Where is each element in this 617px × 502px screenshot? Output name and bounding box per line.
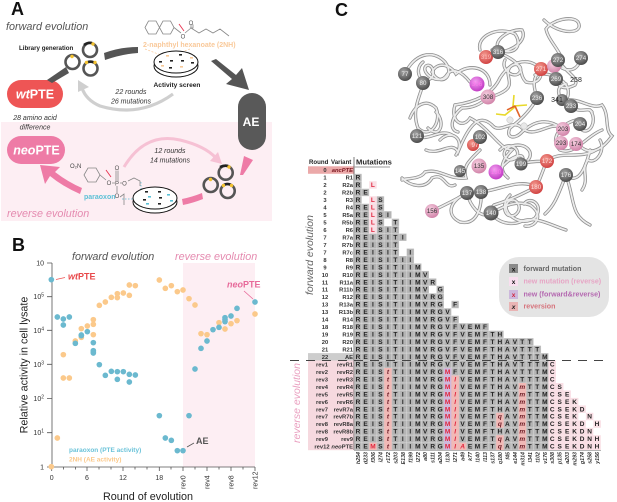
round column: 20 xyxy=(322,340,328,346)
legend: paraoxon (PTE activity) xyxy=(69,447,141,454)
round column: rev7 xyxy=(316,407,328,413)
molecule: paraoxon: O xyxy=(115,166,120,172)
round column: 11 xyxy=(322,280,329,286)
legend panel xyxy=(499,257,609,317)
x-axis tick labels: rev0 xyxy=(180,475,188,489)
legend: 2NH (AE activity) xyxy=(69,456,121,464)
mutation letters: RE L SIT xyxy=(356,227,397,234)
label: forward evolution: forward evolution xyxy=(6,21,88,33)
x-axis tick labels: 0 xyxy=(50,475,54,482)
x-axis tick labels: 6 xyxy=(85,475,89,482)
mutation letters: REISITIIMVRGVFVEMFTHAVTTTMC xyxy=(356,361,555,368)
variant column: R1 xyxy=(346,176,354,182)
residue spheres: 140 xyxy=(486,210,497,217)
y-axis tick labels: 4 xyxy=(41,326,44,332)
residue spheres: 180 xyxy=(531,184,542,191)
mutation letters: REISITIIMVRG xyxy=(356,294,443,301)
molecule: paraoxon: P xyxy=(115,182,119,188)
y-axis title: Relative activity in cell lysate xyxy=(18,297,30,433)
variant column: R6 xyxy=(346,228,354,234)
text: reverse rounds: 12 rounds xyxy=(154,148,186,155)
label: library generation: Library generation xyxy=(19,45,74,52)
residue column labels: m293 xyxy=(573,452,579,466)
round column: 22 xyxy=(322,355,328,361)
icon: plasmid rings forward xyxy=(66,42,98,76)
wtPTE pill xyxy=(7,80,63,108)
variant column: R13a xyxy=(339,303,354,309)
AE pill: AE xyxy=(243,115,259,129)
pink band xyxy=(183,263,255,467)
mutation letters: REISITIIMVRGVFVEMFTHAVTTTM xyxy=(356,354,548,361)
mutation letters: REISITIIMVRGV xyxy=(356,309,450,316)
residue column labels: l140 xyxy=(476,452,482,462)
text: reverse rounds: 14 mutations xyxy=(150,158,191,164)
arrow: gray recycle xyxy=(78,80,173,110)
residue spheres: 274 xyxy=(576,55,587,62)
round column: 1 xyxy=(323,176,327,182)
round column: rev3 xyxy=(316,377,329,383)
legend xyxy=(69,447,141,464)
mutation letters: REIS t TIIMVRG M I VEMFTHAV m TTMCSE xyxy=(356,391,570,398)
y-axis tick labels: 10 xyxy=(33,362,41,369)
round column: 2 xyxy=(323,191,327,197)
mutation letters: REIS t TIIMVRG M I VEMFTHAVTTTMC xyxy=(356,376,555,383)
residue column labels: s137 xyxy=(490,451,496,464)
callout: wtPTE xyxy=(56,272,96,282)
heading: panel letter B: B xyxy=(12,235,25,255)
mutation letters: REIS t TIIMVRG M I VEMFTHAV m TTMCSEKDN xyxy=(356,429,592,436)
residue column labels xyxy=(356,451,601,466)
residue column labels: l113 xyxy=(483,452,489,462)
round column: rev8 xyxy=(316,422,329,428)
round column: rev1 xyxy=(316,362,329,368)
residue spheres xyxy=(398,45,588,220)
variant column: ancPTE xyxy=(332,168,354,174)
variant column: revR7a xyxy=(334,407,354,413)
residue spheres: 203 xyxy=(558,126,569,133)
table row highlights xyxy=(308,166,354,450)
variant column: R7c xyxy=(342,250,354,256)
round column: 2 xyxy=(323,183,327,189)
variant column: R7a xyxy=(342,235,354,241)
residue spheres: 80 xyxy=(420,80,427,87)
variant column: rev9 xyxy=(341,437,354,443)
round column: 14 xyxy=(322,318,329,324)
variant column: R3 xyxy=(346,198,354,204)
dashed lines to plate xyxy=(145,49,190,57)
round column: rev7 xyxy=(316,415,328,421)
variant column: R13b xyxy=(339,310,353,316)
y-axis tick labels: 1 xyxy=(40,464,44,472)
orange points: 2NH activity xyxy=(48,277,258,469)
mutation letters: REISITIIMVRGVFVEMFTH xyxy=(356,332,503,338)
table header xyxy=(309,157,392,450)
y-axis tick labels: 3 xyxy=(41,360,44,366)
round column xyxy=(314,168,330,451)
mutation letters: RE M S t TIIMVRG M I A EMFT q AV m TTMCSEKDNH xyxy=(356,444,600,451)
mutation letters: RE L SI xyxy=(356,212,389,219)
residue column labels: i274 xyxy=(378,452,384,462)
ligand xyxy=(496,95,527,129)
variant column: R8 xyxy=(346,258,354,264)
callout: AE xyxy=(187,436,209,447)
residue column labels: v176 xyxy=(543,452,549,464)
round column: 11 xyxy=(322,288,329,294)
callout: AE: AE xyxy=(196,436,209,446)
legend panel: forward mutation xyxy=(524,265,581,273)
variant column: R20 xyxy=(342,340,353,346)
mutation letters: REIS t TIIMVRG M FVEMFTHAVTTTMC xyxy=(356,369,555,376)
residue column labels: p135 xyxy=(558,451,564,465)
y-axis tick labels: 10 xyxy=(33,396,41,403)
variant column: AE xyxy=(345,355,353,361)
variant column: revR3 xyxy=(337,377,354,383)
mutation letters: REIS t TIIMVRG M I VEMFT q AV m TTMCSEKD H xyxy=(356,421,600,428)
mutation letters: R L S xyxy=(356,197,383,204)
round column: 8 xyxy=(323,258,327,264)
molecule: paraoxon: O₂N xyxy=(70,164,81,170)
round column: rev4 xyxy=(316,385,329,391)
residue spheres: 272 xyxy=(553,57,564,64)
residue spheres: 204 xyxy=(575,121,586,128)
residue spheres: 306 xyxy=(472,81,483,88)
residue column labels: l272 xyxy=(416,452,422,462)
molecule: 2-naphthyl hexanoate: O xyxy=(181,34,186,40)
round column: 13 xyxy=(322,310,329,316)
pink mutation cells xyxy=(369,181,601,450)
text: amino acid difference: difference xyxy=(20,124,50,132)
table header: Mutations xyxy=(356,158,392,166)
residue column labels: l271 xyxy=(453,452,459,462)
residue column labels: a203 xyxy=(565,452,571,464)
variant column: R18 xyxy=(342,325,354,331)
variant column: revR8a xyxy=(334,422,354,428)
gray mutation cells xyxy=(354,174,549,450)
residue column labels: E138 xyxy=(401,452,407,464)
x-axis tick labels xyxy=(50,471,260,489)
table bottom rule xyxy=(354,449,601,451)
variant column: R12 xyxy=(342,295,353,301)
text: forward rounds: 22 rounds xyxy=(114,89,147,96)
residue column labels: r172 xyxy=(386,452,392,463)
residue column labels: t102 xyxy=(535,452,541,463)
variant column: R11b xyxy=(339,288,353,294)
mutation letters xyxy=(356,175,600,451)
residue spheres: 319 xyxy=(481,54,492,61)
round column: 18 xyxy=(322,325,329,331)
label: forward evolution: forward evolution xyxy=(72,251,154,263)
residue column labels: e144 xyxy=(513,452,519,464)
residue column labels: d233 xyxy=(364,452,370,464)
residue column labels: q180 xyxy=(498,452,504,464)
variant column: R5b xyxy=(342,220,353,226)
dark segment: library to screen xyxy=(104,47,138,60)
x-axis tick labels: rev4 xyxy=(204,475,212,489)
icon: plasmid rings reverse xyxy=(204,165,235,198)
residue column labels: f306 xyxy=(371,452,377,463)
axes xyxy=(47,263,255,471)
variant column: R2b xyxy=(342,191,353,197)
round column: rev2 xyxy=(316,370,328,376)
round column: 9 xyxy=(323,265,327,271)
residue spheres: 174 xyxy=(571,141,582,148)
residue spheres: 145 xyxy=(455,168,466,175)
mutation letters: REISITIIMV xyxy=(356,272,428,279)
legend panel: x xyxy=(512,292,516,299)
molecule: paraoxon: O xyxy=(115,194,120,200)
round column: 4 xyxy=(323,206,327,212)
mutation letters: REISIT I xyxy=(356,249,411,256)
round column: 6 xyxy=(323,228,327,234)
variant column: R10 xyxy=(342,273,353,279)
round column: 3 xyxy=(323,198,327,204)
molecule: paraoxon: O xyxy=(107,181,112,187)
round column: rev12 xyxy=(314,445,330,451)
pink reverse-evolution background xyxy=(1,122,272,221)
label: reverse evolution: reverse evolution xyxy=(7,208,89,220)
y-axis tick labels: 2 xyxy=(41,394,44,400)
residue spheres: 199 xyxy=(516,161,527,168)
table header: Round xyxy=(309,159,329,166)
variant column: revR8b xyxy=(333,430,353,436)
mutation letters: REIS t TIIMVRG M I VEMFTHAV m TTMCSEK xyxy=(356,399,577,406)
label: residue 258: 258 xyxy=(570,77,582,84)
panel C: structure and mutation table xyxy=(290,0,612,466)
round column: 19 xyxy=(322,332,329,338)
variant column: revR4 xyxy=(337,385,354,391)
callout: neoPTE xyxy=(227,280,261,299)
callout: wtPTE: wtPTE xyxy=(68,272,96,282)
y-axis tick labels xyxy=(33,260,44,472)
variant column: R9 xyxy=(346,265,354,271)
residue column labels: f199 xyxy=(408,452,414,463)
mutation letters: RE L S T xyxy=(356,220,397,226)
label: forward evolution rotated: forward evolution xyxy=(304,215,316,295)
dashed lines to reverse plate xyxy=(122,182,141,199)
residue spheres: 271 xyxy=(536,66,547,73)
mutation letters: REISITIIMVRG F xyxy=(356,302,457,309)
residue column labels: k77 xyxy=(468,451,474,461)
mutation letters: REIS t TIIMVRG M I VEMFTHAV m TTMCSEKD xyxy=(356,406,585,413)
text: forward rounds: 26 mutations xyxy=(110,98,152,106)
neoPTE pill xyxy=(7,136,65,164)
residue spheres: 135 xyxy=(474,163,485,170)
round column: 21 xyxy=(322,348,329,354)
round column: rev9 xyxy=(316,437,329,443)
mutation letters: REISITIIMV G xyxy=(356,287,443,294)
variant column: R11a xyxy=(339,280,354,286)
mutation letters: R L xyxy=(356,182,375,189)
variant column: R14 xyxy=(342,318,354,324)
x-axis tick labels: 18 xyxy=(155,475,163,482)
variant column: R5a xyxy=(342,213,354,219)
dark segment: wtPTE to library xyxy=(47,67,69,83)
variant column: R19 xyxy=(342,332,354,338)
variant column: revR6 xyxy=(337,400,354,406)
mutation letters: REISITIIMVRGVFVEMFTHAVTT xyxy=(356,339,532,346)
residue column labels: s203 xyxy=(393,452,399,464)
residue column labels: g174 xyxy=(580,452,586,465)
residue spheres: 138 xyxy=(476,189,487,196)
heading: panel letter C: C xyxy=(335,0,348,20)
round column: 5 xyxy=(323,220,327,226)
mutation letters: REIS t TIIMVRG M I VEMFT q AV m TTMCSEKDNH xyxy=(356,436,600,443)
mutation letters: RE L S xyxy=(356,205,383,212)
residue spheres: 176 xyxy=(561,172,572,179)
residue spheres: 130 xyxy=(491,169,502,176)
residue spheres: 233 xyxy=(566,103,577,110)
callout: neoPTE: neoPTE xyxy=(227,280,261,290)
mutation letters: REISITI xyxy=(356,234,404,241)
round column: 7 xyxy=(323,243,327,249)
residue spheres: 97 xyxy=(472,142,479,149)
round column: rev5 xyxy=(316,392,329,398)
y-axis tick labels: 10 xyxy=(36,260,44,268)
residue spheres: 293 xyxy=(556,140,567,147)
x-axis tick labels: rev8 xyxy=(228,475,236,489)
arrow: light pink recycle xyxy=(124,139,222,167)
variant column: neoPTE xyxy=(331,445,353,451)
round column: 5 xyxy=(323,213,327,219)
label: paraoxon: paraoxon xyxy=(84,194,116,201)
round column: rev8 xyxy=(316,430,329,436)
x-axis tick labels: rev12 xyxy=(252,471,260,489)
residue column labels: m314 xyxy=(520,452,526,466)
residue column labels: h254 xyxy=(356,452,362,464)
residue spheres: 121 xyxy=(412,133,423,140)
arrow: screen to AE xyxy=(211,59,249,90)
table header: Variant xyxy=(331,159,351,166)
arrow: plate to neoPTE xyxy=(40,165,82,194)
icon: activity screen plate xyxy=(154,51,198,77)
blue points: paraoxon activity xyxy=(48,277,258,453)
mutation letters: REISITIIMVRGVFVEMF xyxy=(356,324,487,331)
round column: rev6 xyxy=(316,400,329,406)
residue column labels: y156 xyxy=(595,452,601,465)
residue spheres: 77 xyxy=(402,71,409,78)
mutation letters: REISITIIMVRGVF xyxy=(356,317,457,324)
label: activity screen: Activity screen xyxy=(154,82,200,89)
legend panel: new mutation (reverse) xyxy=(524,278,602,286)
variant column: revR1 xyxy=(337,362,354,368)
molecule: 2-naphthyl hexanoate xyxy=(145,21,229,40)
dashed divider xyxy=(290,360,608,362)
mutation letters: REIS t TIIMVRG M I VEMFT q AV m TTMCSEK N xyxy=(356,414,592,421)
residue spheres: 308 xyxy=(483,94,494,101)
legend panel: x xyxy=(512,279,516,286)
y-axis tick labels: 1 xyxy=(41,428,44,434)
y-axis tick labels: 5 xyxy=(41,292,44,298)
AE pill xyxy=(238,93,266,150)
residue column labels: l341 xyxy=(528,452,534,462)
y-axis tick labels: 10 xyxy=(33,328,41,335)
residue spheres: 269 xyxy=(551,76,562,83)
variant column: revR5 xyxy=(337,392,354,398)
residue column labels: a49 xyxy=(461,452,467,461)
residue column labels: a80 xyxy=(423,452,429,461)
round column: 7 xyxy=(323,235,327,241)
residue spheres: 137 xyxy=(462,190,473,197)
legend panel: x xyxy=(512,266,516,273)
text: amino acid difference: 28 amino acid xyxy=(12,115,58,122)
x-axis tick labels: 12 xyxy=(119,475,127,482)
round column: 0 xyxy=(323,168,327,174)
neoPTE pill: neoPTE xyxy=(13,144,60,158)
mutation letters: REISIT xyxy=(356,242,397,249)
residue column labels: f45 xyxy=(505,451,511,460)
panel B: activity scatter chart xyxy=(12,235,261,502)
mutation letters: REISITII xyxy=(356,257,411,264)
mutation letters: REISITIIM xyxy=(356,264,421,271)
residue spheres: 172 xyxy=(542,158,553,165)
legend panel: x xyxy=(511,304,516,311)
label: reverse evolution rotated: reverse evolution xyxy=(291,363,303,443)
round column: 7 xyxy=(323,250,327,256)
legend panel: reversion xyxy=(524,302,555,310)
residue column labels: s111 xyxy=(431,452,437,463)
label: 2-naphthyl hexanoate: 2-naphthyl hexanoate (2NH) xyxy=(143,42,236,49)
panel A: evolution cycle xyxy=(1,0,272,221)
y-axis tick labels: 10 xyxy=(33,430,41,437)
pink segment: library to plate xyxy=(182,193,203,205)
residue spheres: 102 xyxy=(475,134,486,141)
round column: 10 xyxy=(322,273,328,279)
residue spheres: 236 xyxy=(532,95,543,102)
variant column: revR2 xyxy=(337,370,353,376)
variant column xyxy=(331,168,354,451)
residue column labels: s258 xyxy=(588,452,594,464)
variant column: R4 xyxy=(346,206,354,212)
residue spheres: 156 xyxy=(427,208,438,215)
mutation letters: REISITIIMVR xyxy=(356,279,435,286)
residue column labels: a204 xyxy=(438,452,444,464)
round column: 12 xyxy=(322,295,328,301)
residue spheres: 316 xyxy=(493,49,504,56)
wtPTE pill: wtPTE xyxy=(16,88,54,102)
molecule: 2-naphthyl hexanoate: O xyxy=(189,21,194,27)
icon: reverse screen plate xyxy=(133,187,177,213)
protein structure ribbons xyxy=(402,19,612,230)
variant column: R7b xyxy=(342,243,353,249)
pink segment: AE to library xyxy=(240,156,253,175)
y-axis tick labels: 10 xyxy=(33,294,41,301)
mutation letters: REIS t TIIMVRG M I VEMFTHAV m TTMCS xyxy=(356,384,563,391)
label: reverse evolution: reverse evolution xyxy=(175,251,257,263)
label: residue 341: 341 xyxy=(551,97,563,104)
variant column: R2a xyxy=(342,183,354,189)
variant column: R21 xyxy=(342,348,354,354)
round column: 13 xyxy=(322,303,329,309)
mutation letters: RE xyxy=(356,190,368,197)
residue column labels: s308 xyxy=(550,452,556,464)
mutation letters: REISITIIMVRGVFVEMFTHAVTTT xyxy=(356,346,539,354)
legend panel: new (forward&reverse) xyxy=(524,290,601,298)
mutation letters: R xyxy=(356,175,361,182)
molecule: paraoxon: O xyxy=(122,182,127,188)
residue column labels: l130 xyxy=(446,452,452,462)
variant column: revR7b xyxy=(333,415,353,421)
molecule: paraoxon xyxy=(70,164,140,205)
